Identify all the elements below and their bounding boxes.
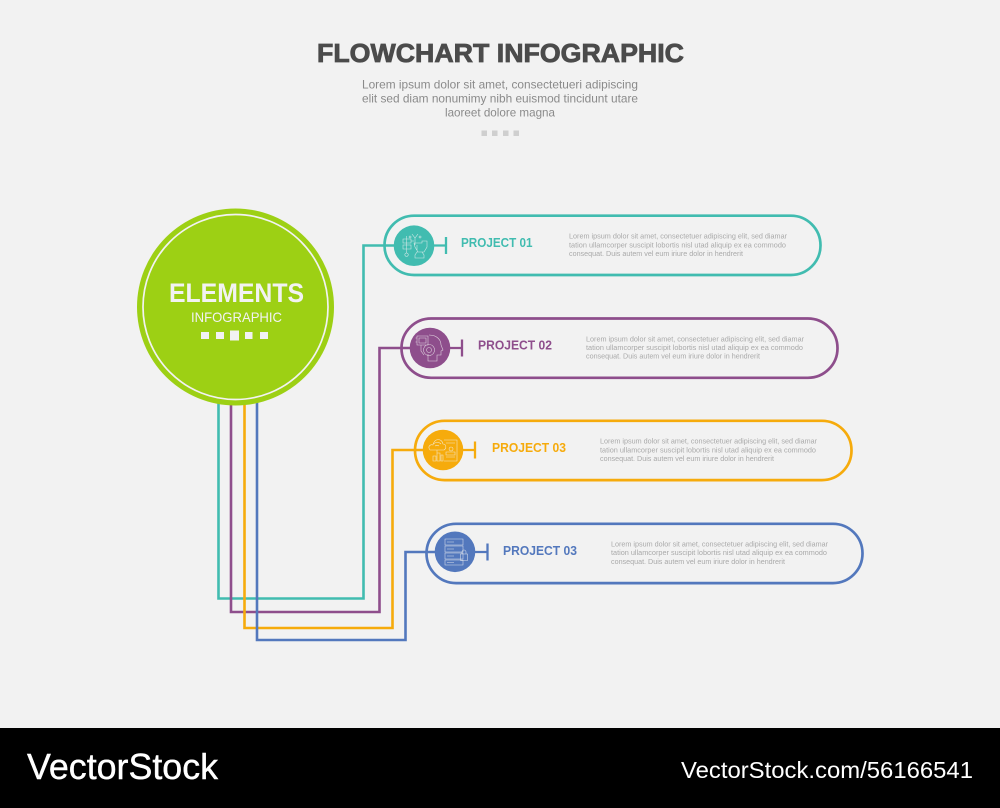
icon: secure server [435, 532, 475, 572]
description [600, 438, 818, 463]
t-bar [430, 340, 462, 356]
connector: project 03 [244, 395, 425, 628]
title dots [482, 130, 519, 136]
circle heading: ELEMENTS [169, 278, 304, 308]
description: tation ullamcorper suscipit lobortis nisl utad aliquip ex ea commodo [611, 550, 827, 557]
label: PROJECT 03 [492, 441, 566, 455]
t-bar [443, 442, 475, 458]
t-bar [414, 237, 446, 254]
panel: project 02 [402, 318, 838, 378]
panel: project 04 [426, 524, 862, 583]
description: Lorem ipsum dolor sit amet, consectetuer adipiscing elit, sed diamar [600, 438, 818, 446]
description: Lorem ipsum dolor sit amet, consectetuer adipiscing elit, sed diamar [611, 542, 829, 548]
label: PROJECT 03 [503, 544, 577, 558]
icon: automation hand [394, 225, 434, 266]
subtitle text block [362, 78, 638, 120]
description [569, 234, 788, 258]
description: consequat. Duis autem vel eum iriure dolor in hendrerit [600, 456, 774, 463]
description: tation ullamcorper suscipit lobortis nisl utad aliquip ex ea commodo [569, 242, 786, 250]
description: tation ullamcorper suscipit lobortis nisl utad aliquip ex ea commodo [586, 345, 803, 352]
central circle [137, 208, 334, 406]
connector: project 02 [231, 348, 412, 612]
description: Lorem ipsum dolor sit amet, consectetuer adipiscing elit, sed diamar [569, 234, 788, 240]
watermark band [0, 728, 1000, 808]
subtitle text block: laoreet dolore magna [445, 106, 555, 120]
icon: ai head [410, 328, 450, 368]
connector: project 04 [257, 395, 436, 640]
connector: project 01 [218, 246, 395, 598]
watermark logo: VectorStock [27, 746, 219, 787]
t-bar [455, 544, 488, 560]
icon: cloud and mobile [423, 430, 463, 470]
circle dots [201, 330, 268, 340]
panel: project 03 [415, 421, 852, 480]
description: consequat. Duis autem vel eum iriure dolor in hendrerit [569, 251, 743, 258]
description: tation ullamcorper suscipit lobortis nisl utad aliquip ex ea commodo [600, 448, 816, 454]
description: consequat. Duis autem vel eum iriure dolor in hendrerit [586, 354, 760, 360]
watermark url: VectorStock.com/56166541 [681, 757, 973, 783]
description [611, 542, 829, 566]
subtitle text block: Lorem ipsum dolor sit amet, consectetueri adipiscing [362, 78, 638, 92]
label: PROJECT 01 [461, 236, 533, 250]
description: Lorem ipsum dolor sit amet, consectetuer adipiscing elit, sed diamar [586, 336, 805, 344]
label: PROJECT 02 [478, 338, 552, 352]
title: FLOWCHART INFOGRAPHIC [317, 40, 684, 68]
description: consequat. Duis autem vel eum iriure dolor in hendrerit [611, 559, 785, 566]
panel: project 01 [384, 216, 820, 275]
description [586, 336, 805, 360]
subtitle text block: elit sed diam nonumimy nibh euismod tincidunt utare [362, 92, 638, 106]
circle subheading: INFOGRAPHIC [191, 309, 282, 325]
